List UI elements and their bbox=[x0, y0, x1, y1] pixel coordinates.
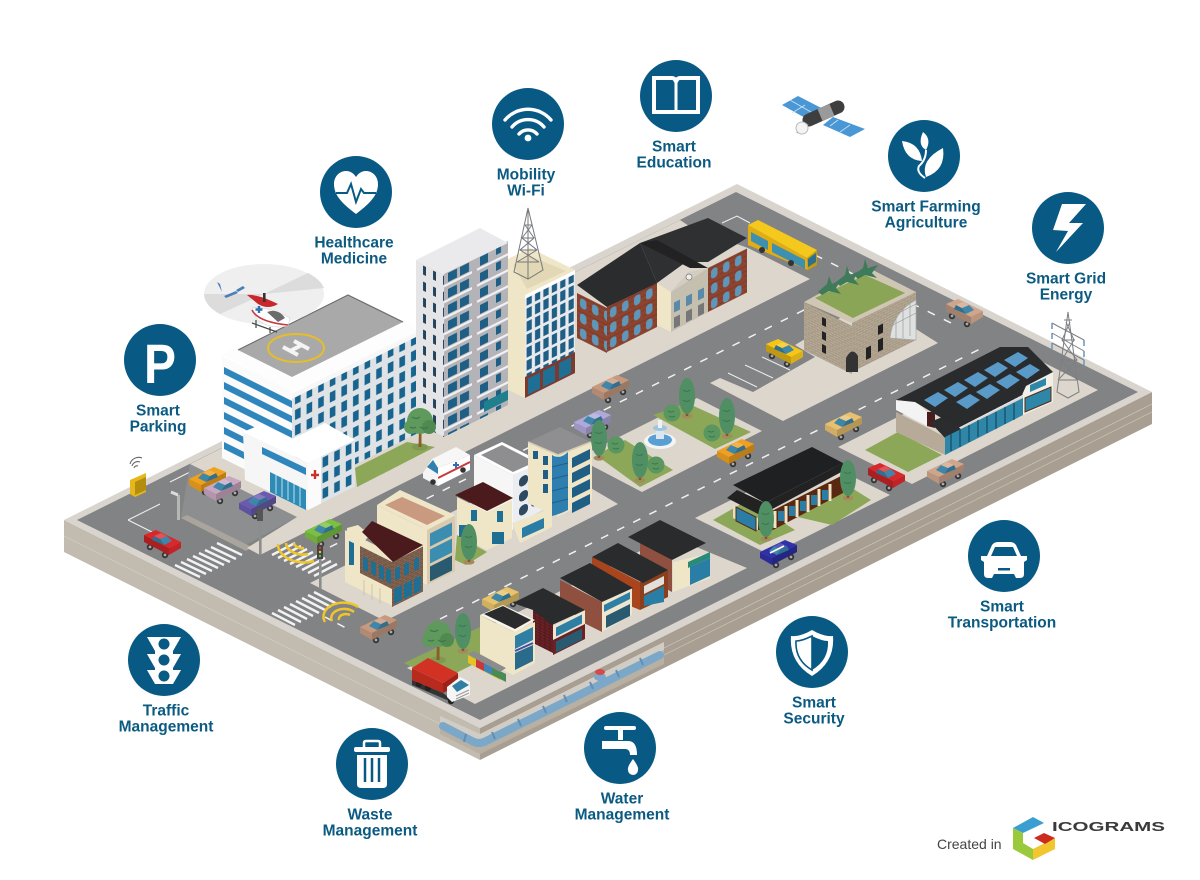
label: Mobility bbox=[497, 166, 556, 184]
credit: Created in Icograms bbox=[937, 817, 1166, 860]
pagoda roof building bbox=[727, 447, 845, 534]
label: Smart bbox=[136, 402, 180, 420]
green roof building bbox=[804, 259, 916, 374]
feature: Smart Education bbox=[637, 60, 712, 172]
police stripe bbox=[770, 546, 784, 553]
icon: wifi bbox=[492, 88, 564, 160]
label: Healthcare bbox=[314, 234, 394, 252]
school building bbox=[577, 218, 747, 353]
row house D bbox=[592, 543, 668, 610]
traffic light north bbox=[257, 508, 263, 555]
hospital left wall bbox=[222, 356, 292, 493]
label: Water bbox=[601, 790, 643, 808]
feature: Smart Grid Energy bbox=[1026, 192, 1106, 304]
crosswalk: south street bbox=[272, 592, 337, 625]
block: solar building bbox=[838, 353, 1098, 484]
label: Medicine bbox=[321, 250, 388, 268]
solar roof building bbox=[896, 347, 1053, 455]
building: pink roof bbox=[377, 490, 455, 585]
green car bbox=[305, 519, 342, 547]
label: Wi-Fi bbox=[507, 182, 545, 200]
ambulance bbox=[423, 447, 470, 486]
parking median bbox=[181, 515, 252, 551]
tree by hospital bbox=[404, 408, 436, 450]
grass: hospital strip bbox=[355, 442, 435, 487]
label: Security bbox=[783, 710, 845, 728]
asphalt road surface bbox=[77, 192, 1138, 720]
crosswalk: parking entrance bbox=[175, 543, 242, 577]
cars: back road bbox=[189, 299, 983, 519]
feature: Smart Farming Agriculture bbox=[871, 120, 981, 232]
logo mark bbox=[1013, 817, 1055, 860]
park fountain bbox=[644, 420, 676, 449]
feature: Smart Transportation bbox=[948, 520, 1056, 632]
icon: lightning bolt bbox=[1032, 192, 1104, 264]
feature: Healthcare Medicine bbox=[314, 156, 394, 268]
helicopter bbox=[217, 282, 290, 333]
label: Parking bbox=[130, 418, 186, 436]
feature: Smart Security bbox=[776, 616, 848, 728]
wifi: south crossing bbox=[323, 603, 358, 622]
label: Traffic bbox=[143, 702, 190, 720]
icon: trash can bbox=[336, 728, 408, 800]
hospital roof bbox=[222, 293, 421, 392]
power pylon bbox=[1052, 312, 1084, 398]
label: Smart Grid bbox=[1026, 270, 1106, 288]
wifi: parking kiosk bbox=[130, 457, 142, 468]
logo wordmark: ICOGRAMS bbox=[1052, 819, 1166, 834]
credit text: Created in bbox=[937, 836, 1002, 852]
feature: Traffic Management bbox=[119, 624, 213, 736]
cream tower with antenna bbox=[508, 208, 575, 398]
icon: car bbox=[968, 520, 1040, 592]
label: Energy bbox=[1040, 286, 1093, 304]
icon: shield bbox=[776, 616, 848, 688]
parking kiosk bbox=[130, 473, 146, 497]
satellite bbox=[782, 96, 865, 137]
label: Management bbox=[575, 806, 669, 824]
road markings bbox=[128, 216, 982, 628]
radio antenna bbox=[514, 208, 543, 279]
feature: Water Management bbox=[575, 712, 669, 824]
label: Smart bbox=[652, 138, 696, 156]
wifi: north crossing bbox=[278, 543, 314, 562]
hospital right wall bbox=[292, 330, 420, 496]
icon: faucet bbox=[584, 712, 656, 784]
label: Agriculture bbox=[885, 214, 968, 232]
label: Smart Farming bbox=[871, 198, 981, 216]
helipad marking bbox=[268, 334, 324, 362]
hospital annex bbox=[243, 423, 355, 510]
feature: Smart Parking bbox=[124, 324, 196, 436]
label: Smart bbox=[980, 598, 1024, 616]
red cross bbox=[311, 470, 319, 479]
shop tree bbox=[461, 524, 477, 565]
label: Smart bbox=[792, 694, 836, 712]
icon: parking P: P bbox=[144, 332, 176, 395]
trees near truck bbox=[422, 613, 471, 664]
apartment tower bbox=[416, 228, 508, 437]
underground water pipe bbox=[440, 642, 664, 754]
block: shops sidewalk bbox=[310, 468, 618, 621]
label: Management bbox=[119, 718, 213, 736]
building: brick with brown roof bbox=[345, 521, 423, 607]
label: Education bbox=[637, 154, 711, 172]
feature: Waste Management bbox=[323, 728, 417, 840]
icon: leaves bbox=[888, 120, 960, 192]
block: row houses bbox=[404, 536, 747, 704]
row house E bbox=[628, 520, 710, 592]
row house B bbox=[513, 588, 585, 655]
icon: open book bbox=[640, 60, 712, 132]
block: pagoda building bbox=[695, 458, 890, 555]
traffic light south bbox=[317, 545, 323, 589]
pagoda trees bbox=[758, 460, 856, 542]
label: Transportation bbox=[948, 614, 1056, 632]
recycling bins bbox=[468, 651, 506, 682]
block: park bbox=[577, 398, 762, 492]
block: hospital and school sidewalk bbox=[190, 220, 810, 555]
city platform base bbox=[64, 184, 1152, 760]
camera pole bbox=[171, 492, 180, 520]
building: white with grey roof bbox=[474, 442, 542, 530]
hospital tower block bbox=[222, 293, 421, 496]
school bus bbox=[748, 220, 817, 270]
parking lot pad bbox=[181, 464, 297, 544]
cars: front roads bbox=[144, 459, 964, 643]
block: green roof building lot bbox=[710, 300, 938, 421]
row house A bbox=[480, 605, 535, 675]
park trees bbox=[591, 378, 735, 483]
icon: traffic light bbox=[128, 624, 200, 696]
crosswalk: north street bbox=[272, 543, 337, 576]
label: Waste bbox=[347, 806, 393, 824]
garbage truck bbox=[412, 658, 470, 704]
building: cream with dark pyramid roof bbox=[455, 482, 513, 550]
helicopter shadow disc bbox=[204, 264, 324, 324]
icon: heart with pulse bbox=[320, 156, 392, 228]
grass: shop corner bbox=[455, 535, 487, 565]
row house C bbox=[560, 563, 633, 632]
label: Management bbox=[323, 822, 417, 840]
feature: Mobility Wi-Fi bbox=[492, 88, 564, 200]
building: grey roof with blue glass bbox=[512, 427, 592, 543]
